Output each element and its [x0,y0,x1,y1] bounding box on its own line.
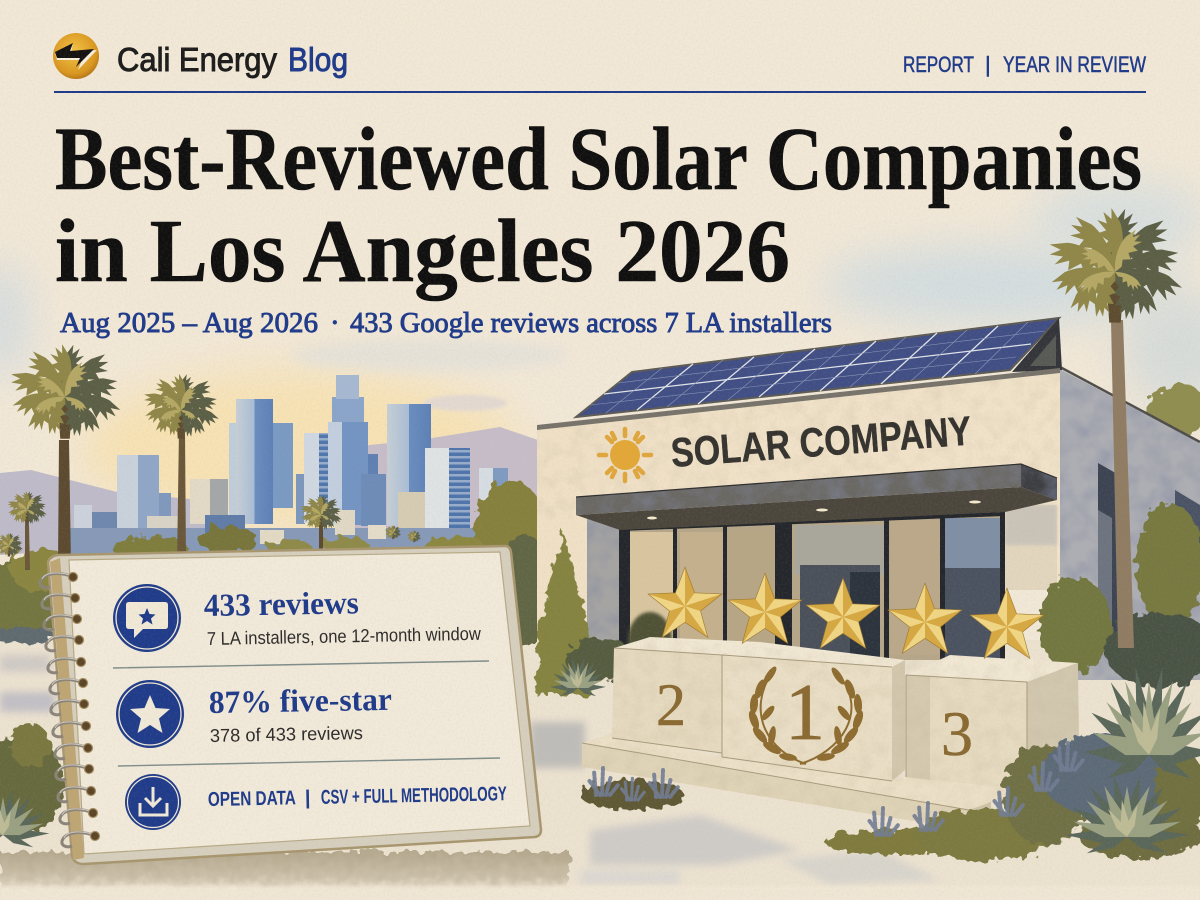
header: logo mark [53,33,99,79]
text: open data: OPEN DATA [208,787,296,811]
stone pillar [587,504,1058,640]
text: open data: | [305,787,311,809]
icon: star badge [116,680,184,748]
palm trees left [0,343,421,570]
podium [582,637,1080,832]
notebook page [69,552,530,854]
mountains [0,427,538,555]
notebook panel [40,546,541,864]
header: report label: | [985,52,991,77]
rooftop solar array [576,318,1062,417]
storefront glass [619,512,1005,668]
third block [906,655,1078,682]
stat: five-star [116,680,392,748]
sun logo [599,429,651,481]
header: report label [903,52,1146,77]
stat: reviews [113,584,482,652]
planting beside building [535,503,1200,695]
podium block edges [582,648,1027,810]
title [55,110,1142,301]
first place number: 1 [785,669,825,757]
notebook back cover [48,546,541,864]
solar company building [537,318,1200,680]
icon: download [125,774,181,830]
bottom fade [0,886,1200,900]
side wall [1058,367,1200,680]
notebook binding strip [50,558,84,860]
header: report label: REPORT [903,52,974,77]
front wall [537,368,1060,660]
right palm tree [1045,207,1184,648]
subtitle: 433 Google reviews across 7 LA installers [350,307,832,339]
far right foliage [1148,384,1200,436]
text: installers: 7 LA installers, one 12-month window [207,623,482,649]
sign text: SOLAR COMPANY [669,408,973,476]
open data row [125,774,507,830]
third place number: 3 [941,698,973,769]
text: open data [208,783,507,811]
skyline: downtown Los Angeles [70,375,510,558]
second place number: 2 [656,672,686,738]
side windows [1098,463,1200,640]
subtitle [60,307,832,339]
five gold stars [649,568,1043,658]
base step [582,733,1027,810]
canopy [576,464,1057,530]
text: 378 of 433 reviews: 378 of 433 reviews [210,722,363,746]
subtitle: Aug 2025 – Aug 2026 [60,307,318,339]
header: brand name: Cali Energy [117,41,277,78]
first block [722,642,905,667]
laurel wreath [747,665,865,764]
subtitle: · [330,307,340,339]
header: blog: Blog [288,41,348,78]
heading: 433 reviews: 433 reviews [203,584,359,623]
icon: chat bubble with star [113,584,181,652]
second block [614,637,760,655]
sky washes [0,180,1200,530]
title: in Los Angeles 2026 [55,202,790,301]
trees behind the notebook [0,480,553,835]
text: open data: CSV + FULL METHODOLOGY [321,783,507,809]
spiral rings [40,572,100,847]
foreground plants [0,657,1200,861]
header: report label: YEAR IN REVIEW [1003,52,1146,77]
heading: 87% five-star: 87% five-star [208,681,392,720]
podium stone texture [632,642,1042,809]
ground pavement [0,640,1200,900]
